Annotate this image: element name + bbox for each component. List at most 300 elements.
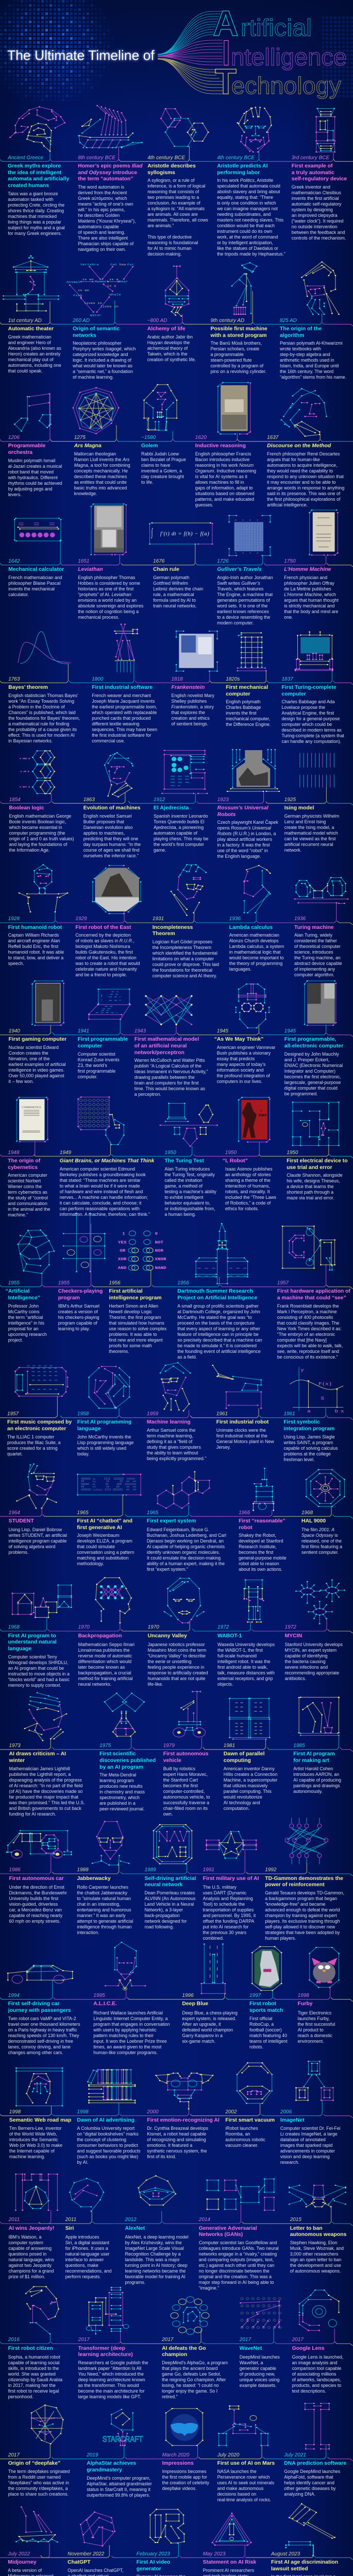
event: Turing machine: considered the father (294, 938, 337, 943)
event: Checkers-playing program: his checkers-playing (58, 1315, 99, 1320)
icon: ELIZA screen: EEEEEE LL IIII ZZZZZZ AAAAA (81, 1478, 136, 1480)
event: Semantic Web road map: machine learning. (9, 2154, 45, 2159)
event: Inductive reasoning: English philosopher Francis (195, 451, 251, 456)
event: Furby: AI product to (298, 2027, 324, 2032)
event: Meta-Dendral: in chemistry and mass (99, 1789, 145, 1794)
event: Gulliver's Travels (217, 558, 273, 625)
text: 1820s (226, 676, 240, 682)
event: Aristotle predicts AI: instrument could do its own (217, 229, 272, 234)
text: 2016 (8, 2337, 20, 2343)
event: First self-driving car journey: on a Paris highway in heavy traffic (8, 2027, 77, 2032)
event: Ctesibius: First example of (292, 163, 332, 169)
text: 1750 (284, 558, 296, 564)
event: WABOT-1: WABOT-1 (217, 1633, 242, 1639)
event: AlphaGo: retired.” (162, 2394, 178, 2399)
event: perceptron: brain and computers for the first (135, 1080, 198, 1086)
icon: semantic network: is an (78, 289, 89, 292)
event: L'Homme Machine (284, 558, 339, 620)
event: STUDENT: intelligence program capable (9, 1538, 66, 1544)
event: MYCIN: antibiotics. (285, 1676, 306, 1681)
event: L'Homme Machine: L’Homme Machine, which (284, 592, 336, 597)
text: 1620 (195, 435, 207, 440)
event: MYCIN: the bacteria causing (285, 1659, 326, 1664)
icon: Perseverance rover (219, 2406, 268, 2446)
icon: semantic network: Animal (66, 281, 80, 284)
event: HAL 9000: first films featuring a (301, 1544, 342, 1549)
event: Uncanny Valley: response to artificially created (148, 1670, 208, 1675)
icon: Boolean logic gates: A AND B (20, 758, 30, 760)
event: autonomous weapons letter: sign an open letter to ban (290, 2257, 341, 2262)
event: First music by computer: score created for a string (7, 1446, 58, 1451)
event: syllogisms: mammals. Therefore, all cows (147, 217, 208, 223)
event: Checkers-playing program: creates a version of (58, 1309, 98, 1314)
event: MYCIN: MYCIN (285, 1633, 302, 1639)
event: Artificial Intelligence term: “Artificial (6, 1289, 29, 1294)
event: El Ajedrecista: Spanish inventor Leonardo (154, 813, 208, 818)
event: Frankenstein: creation and ethics (171, 715, 210, 720)
icon: WABOT-1 (244, 1580, 263, 1622)
event: First robot sports match: sports match (249, 2008, 283, 2013)
event: Gulliver's Travels: The Engine, a machine that (217, 592, 273, 597)
event: Homer: he describes Golden (78, 213, 120, 218)
event: Chain rule (153, 558, 203, 608)
heading: Artificial: A (213, 3, 239, 43)
event: Lambda calculus: American mathematician (229, 933, 279, 938)
text: 1925 (284, 797, 296, 803)
event: Discourse on the Method: they would need the capability to (267, 468, 333, 473)
event: Ctesibius: system by designing (292, 207, 333, 212)
event: Lambda calculus: languages. (229, 967, 251, 972)
event: Programmable orchestra: by adjusting pegs and (8, 486, 53, 492)
event: Google Lens: of artworks, landscapes, (292, 2377, 341, 2382)
event: First autonomous car: capable of reaching nearly (9, 1913, 62, 1918)
heading: Technology: T (215, 61, 237, 101)
icon: semantic network: Fish (73, 294, 82, 297)
event: Homer: means “acting of one’s own (78, 201, 133, 207)
timeline row 18 (0, 2204, 353, 2226)
event: Giant Brains: that stated: “These machines are similar (60, 1178, 141, 1183)
event: Ctesibius: an improved clepsydra (292, 213, 338, 218)
event: stored program: pins on a revolving cylinder. (210, 369, 266, 374)
event: First robot of the East: Concerned by the depiction (75, 933, 131, 938)
icon: DART star (207, 1832, 256, 1858)
event: First use of AI on Mars: Perseverance rover which (217, 2475, 270, 2480)
event: algorithm: “algorithm” stems from his name. (280, 375, 346, 380)
event: Evolution of machines: course of ages we shall find (83, 847, 140, 852)
event: Ctesibius: mathematician Ctesibius (292, 190, 341, 195)
event: Giant Brains: American computer scientist Edmund (60, 1166, 135, 1172)
event: Aristotle predicts AI: the tripods made by Hephaestus.” (217, 251, 285, 257)
event: Discourse on the Method: argues that for human-like (267, 457, 320, 462)
timeline row 16 (0, 1980, 353, 2002)
event: Incompleteness Theorem: Logician Kurt Gödel proposes (153, 939, 212, 944)
event: First humanoid robot: speech. (8, 961, 24, 966)
event: ImageNet: Computer scientist Dr. Fei-Fei (280, 2126, 341, 2131)
event: I, Robot: Isaac Asimov publishes (225, 1166, 273, 1172)
timeline row 7 (0, 903, 353, 925)
event: Logic Theorist: proofs for some math (109, 1343, 152, 1348)
event: WaveNet: WaveNet, a (240, 2360, 263, 2365)
event: ChatGPT (68, 2560, 126, 2576)
event: Incompleteness Theorem: limitations on what a computer (153, 956, 214, 961)
event: Dartmouth: that every aspect of learning or any other (177, 1326, 260, 1331)
event: Dartmouth: proceed on the basis of the conjecture (177, 1320, 255, 1326)
icon: Jacquard loom (115, 624, 137, 672)
event: First robot sports match: teams of intelligent (249, 2039, 288, 2044)
event: Ars Magna: Magna, a tool for combining (74, 463, 130, 468)
event: First robot sports match: First robot (249, 2001, 276, 2007)
event: perceptron: Warren McCulloch and Walter Pitts (135, 1058, 205, 1063)
timeline row 10 (0, 1224, 353, 1289)
event: First expert system: Buchanan, Joshua Lederberg, and Carl (147, 1533, 226, 1538)
event: I, Robot: “I, Robot” (223, 1158, 248, 1164)
event: SAINT: integration program (283, 1426, 334, 1432)
event: AARON: autonomously. (293, 1789, 323, 1794)
event: Programmable orchestra: levers. (8, 492, 22, 497)
event: As We May Think: computers in our lives. (217, 1079, 262, 1084)
event: First self-driving car journey: journey with passengers (8, 2008, 71, 2013)
event: MYCIN: severe infections and (285, 1665, 328, 1670)
event: semantic networks: of machine learning. (73, 375, 114, 380)
icon: Impressions mask (166, 2409, 203, 2446)
event: parallel computing: that utilizes massively (224, 1783, 267, 1788)
event: Chain rule: train neural networks. (153, 603, 197, 608)
event: Meta-Dendral: discoveries published (99, 1758, 156, 1764)
event: ImageNet (280, 2117, 341, 2165)
event: Machine learning: term machine learning, (147, 1433, 193, 1438)
event: STUDENT: writes STUDENT, an artificial (9, 1533, 67, 1538)
event: Incompleteness Theorem (153, 925, 219, 979)
event: First music by computer: First music composed by (7, 1419, 72, 1425)
event: AI wins Jeopardy!: questions posed in (9, 2251, 46, 2257)
event: Semantic Web road map: Web (or Web 3.0) to make (9, 2143, 62, 2148)
event: First use of AI on Mars: decisions based on (217, 2492, 256, 2497)
event: Ancient Greece: living things was a popular (8, 219, 61, 225)
event: The Turing Test: called the imitation (164, 1178, 203, 1183)
icon: automatic theater (4, 256, 59, 311)
event: Aristotle predicts AI: performing labor (217, 170, 260, 176)
event: First robot sports match: robots. (249, 2044, 263, 2049)
icon: NAVLAB (154, 1825, 192, 1864)
event: Logic Theorist (109, 1289, 166, 1354)
event: Incompleteness Theorem: computer science and AI theory. (153, 973, 217, 978)
event: Giant Brains: nerves... A machine can handle information; (60, 1194, 148, 1199)
event: Siri: questions, make (65, 2263, 98, 2268)
event: First robot of the East: biologist Makoto Nishimura (75, 944, 130, 949)
icon: Shakey robot (253, 1468, 274, 1511)
text: 1929 (75, 916, 87, 922)
event: I, Robot: sharing a theme of the (225, 1178, 271, 1183)
event: Statement on AI Risk (203, 2560, 259, 2576)
event: Discourse on the Method: said in its presence. This was one of (267, 491, 340, 496)
event: Kismet: Dr. Cynthia Breazeal develops (147, 2126, 208, 2131)
text: 1726 (217, 558, 228, 564)
text: 2017 (292, 2337, 304, 2343)
icon: Golem (144, 385, 177, 430)
event: ENIAC: Integrator and Computer) (284, 1069, 335, 1074)
text: 1994 (8, 1993, 20, 1998)
text: 1985 (293, 1743, 305, 1749)
event: Siri: Apple introduces (65, 2234, 99, 2240)
event: autonomous weapons letter: Stephen Hawking, Elon (290, 2240, 337, 2245)
event: Dawn of AI advertising: consumer behaviors to predict (77, 2143, 138, 2148)
text: 1968 (301, 1510, 313, 1516)
event: First humanoid robot (8, 925, 64, 967)
event: Golem: Rabbi Judah Loew (141, 451, 179, 456)
event: Lisp: language (77, 1426, 101, 1432)
text: 1943 (135, 1028, 146, 1034)
event: Mark I Perceptron: Frank Rosenblatt develops the (277, 1303, 339, 1309)
event: Meta-Dendral: spectrometry, which (99, 1795, 140, 1800)
event: GANs: no longer discriminate between the (199, 2268, 270, 2274)
event: AlexNet: landslide. This was a major (125, 2257, 180, 2262)
event: Transformer: landmark paper “Attention Is All (78, 2366, 141, 2371)
event: The Turing Test: Alan Turing introduces (164, 1166, 210, 1172)
event: Ancient Greece: Greek myths explore (8, 163, 61, 169)
timeline row 14 (0, 1735, 353, 1752)
icon: Dartmouth Hall (196, 1224, 248, 1284)
event: Turing machine: science, introduces (294, 950, 333, 955)
event: First humanoid robot: and aircraft engineer Alan (8, 938, 60, 943)
event: algorithm: Islam, India, and Europe until (280, 363, 339, 368)
timeline row 3 (0, 394, 353, 442)
event: Uncanny Valley: humanoids that are not quite (148, 1676, 205, 1681)
event: Leviathan: English philosopher Thomas (78, 575, 135, 580)
event: Google Lens: of associating millions (292, 2371, 336, 2377)
text: 825 AD (280, 318, 297, 324)
text: 1854 (9, 797, 21, 803)
event: Machine learning: Arthur Samuel coins the (147, 1428, 195, 1433)
event: TD-Gammon: human players. (265, 1936, 296, 1941)
event: Frankenstein: of sentient beings. (171, 721, 208, 726)
event: El Ajedrecista: the world’s first computer (154, 842, 204, 847)
event: Automatic theater: mechanical play out of (8, 357, 54, 362)
event: Artificial Intelligence term: intelligence” in his (8, 1320, 44, 1326)
event: Deep Blue: Deep Blue, a chess-playing (182, 2010, 238, 2015)
event: ChatGPT: OpenAI launches ChatGPT, (68, 2568, 124, 2573)
event: Dartmouth: Dartmouth Summer Research (177, 1289, 253, 1294)
text: 2017 (162, 2337, 173, 2343)
event: syllogisms: for AI to mimic human (147, 246, 192, 251)
event: Ars Magna: Ramon Llull invents the Ars (74, 457, 129, 462)
text: 1989 (144, 1867, 156, 1873)
event: Mechanical calculator: invents the mechanical (8, 586, 55, 591)
event: Programmable orchestra: Muslim polymath Ismail (8, 458, 55, 463)
event: autonomous weapons letter: the development and use (290, 2263, 341, 2268)
event: Bayes' theorem: English statistician Thomas Bayes’ (8, 692, 78, 698)
event: ALVINN: Dean Pomerleau creates (144, 1890, 195, 1895)
event: Alchemy of life: alchemical theory of (147, 345, 188, 350)
event: Ars Magna: as entities that could unite (74, 480, 127, 485)
event: Gulliver's Travels: word sets. It is one of the (217, 603, 267, 608)
event: First self-driving car journey: travel over one thousand kilometers (8, 2022, 80, 2027)
event: First military use of AI: offset the funding DARPA (203, 1919, 254, 1924)
event: Homer: will.” In his epic poems, (78, 207, 125, 212)
heading: Intelligence: I (222, 33, 230, 73)
event: Chain rule: German polymath (153, 575, 189, 580)
event: Stanford Cart: computer-controlled, (163, 1789, 205, 1794)
text: 1948 (8, 1150, 20, 1156)
text: 1275 (74, 435, 86, 440)
event: First robot sports match: RoboCup, a (249, 2022, 274, 2027)
event: Golem: clay creature brought (141, 474, 184, 479)
text: 1955 (58, 1280, 70, 1286)
heading: Technology: echnology (231, 72, 341, 99)
event: TD-Gammon (265, 1876, 344, 1941)
event: First smart vacuum (225, 2117, 275, 2148)
event: Transformer: as the transformer. This would (78, 2383, 139, 2388)
event: Backpropagation: method for training artificial (78, 1676, 133, 1681)
event: First robot citizen: personhood. (8, 2394, 33, 2399)
icon: AARON artwork (299, 1697, 339, 1735)
event: GANs: major step forward in AI being able to (199, 2280, 274, 2285)
event: Aristotle predicts AI: we can imagine managers not (217, 206, 278, 211)
icon: ELIZA screen (78, 1475, 141, 1495)
event: Chain rule: rule, a mathematical (153, 592, 194, 597)
event: Ancient Greece: created humans (8, 183, 49, 189)
icon: VaMP car (8, 1965, 73, 1984)
event: First mechanical computer: computer (226, 691, 250, 697)
event: Artificial Intelligence term (8, 1289, 47, 1343)
icon: uncanny face (164, 1578, 204, 1623)
icon: chain rule formula: ∫ (151, 526, 153, 539)
event: AARON: First AI program (293, 1751, 335, 1757)
event: Programmable orchestra: robot band that moved (8, 469, 54, 474)
event: Meta-Dendral: The Meta-Dendral (99, 1772, 136, 1777)
text: 1981 (224, 1743, 235, 1749)
event: L'Homme Machine: de La Mettrie publishes (284, 586, 331, 591)
event: Ars Magna: basic truths into advanced (74, 485, 127, 490)
event: syllogisms: two premises leading to a (147, 195, 199, 200)
event: L'Homme Machine: that the body and mind are (284, 609, 338, 614)
event: WABOT-1: first android able to walk, (217, 1665, 268, 1670)
event: SHRDLU (8, 1633, 70, 1688)
text: 1928 (8, 916, 20, 922)
text: 2000 (147, 2109, 159, 2115)
event: The Turing Test: or indistinguishable from, (164, 1206, 215, 1211)
event: Homer: Greek αὐτόματον, which (78, 196, 127, 201)
event: parallel computing (224, 1751, 277, 1811)
event: Ising model: network. (284, 847, 301, 852)
event: First robot of the East: of robots as slaves in R.U.R., (75, 938, 135, 943)
event: ELIZA: that could simulate (77, 1544, 115, 1549)
event: cybernetics: and communication (8, 1201, 47, 1206)
event: El Ajedrecista: Ajedrecista, a pioneering (154, 824, 204, 829)
event: Ars Magna: concepts mechanically. He (74, 468, 128, 473)
event: First use of AI on Mars (217, 2461, 275, 2503)
event: Deep Blue: defeated world champion (182, 2027, 233, 2032)
event: AlexNet (125, 2226, 189, 2285)
event: Jabberwacky (77, 1876, 133, 1936)
event: semantic networks: a “semantic net,” a foundation (73, 369, 133, 374)
event: Aristotle predicts AI: like the statues of Daedalus or (217, 246, 278, 251)
text: 1972 (217, 1624, 229, 1630)
event: Giant Brains: information. A machine, therefore, can think.” (60, 1212, 150, 1217)
icon: Connection Machine (230, 1699, 270, 1739)
event: First expert system: identify unknown organic molecules. (147, 1550, 220, 1555)
event: AlphaGo: champion (162, 2352, 187, 2358)
event: El Ajedrecista: automaton capable of (154, 831, 197, 836)
event: Incompleteness Theorem: the Incompleteness Theorem (153, 945, 211, 950)
event: ALVINN: ALVINN (An Autonomous (144, 1896, 195, 1901)
event: Leviathan (78, 558, 143, 620)
event: cybernetics: term cybernetics as (8, 1190, 47, 1195)
event: First military use of AI: Tool) to schedule the (203, 1902, 245, 1907)
event: Discourse on the Method: artificial intelligence. (267, 502, 308, 507)
event: Deep Blue (182, 2001, 238, 2044)
event: SHRDLU: First AI program to (8, 1633, 56, 1639)
icon: symbolic integration graph: F(x) (318, 1381, 332, 1386)
event: cybernetics (8, 1158, 50, 1218)
event: Uncanny Valley: Japanese robotics professor (148, 1642, 205, 1647)
text: 1912 (154, 797, 165, 803)
event: Leviathan: absolute sovereign and explores (78, 603, 143, 608)
event: AI wins Jeopardy!: IBM’s Watson, a (9, 2234, 41, 2240)
event: AI winter: publishes the Lighthill report, a (9, 1772, 71, 1777)
event: Bayes' theorem: the probability of a cause given its (8, 726, 77, 732)
event: I, Robot: ethics for robots. (225, 1206, 259, 1211)
event: First gaming computer: it – few won. (9, 1079, 34, 1084)
event: Lambda calculus: Lambda calculus (229, 925, 273, 930)
event: semantic networks: what would later be known as (73, 363, 132, 368)
icon: semantic network: has (120, 263, 126, 266)
event: HAL 9000 (301, 1518, 342, 1555)
icon: Ars Magna wheel (73, 388, 119, 434)
event: The Turing Test: behavior equivalent to, (164, 1200, 210, 1206)
event: autonomous weapons letter: Musk, Steve Wozniak, and (290, 2246, 344, 2251)
icon: logic gates table: 1 (122, 1232, 125, 1236)
text: 2019 (87, 2452, 98, 2458)
event: Homer: The word automaton is (78, 184, 124, 190)
event: The Turing Test: testing a machine’s ability (164, 1189, 216, 1194)
event: Boolean logic: computer programming (the (9, 831, 65, 836)
text: 1637 (267, 435, 278, 440)
event: MYCIN: Stanford University develops (285, 1642, 343, 1647)
event: algorithm: wrote textbooks with (280, 346, 321, 351)
event: AlphaStar: DeepMind’s computer program, (87, 2476, 150, 2481)
text: 1945 (217, 1028, 228, 1034)
event: First programmable computer: Konrad Zuse invents (78, 1057, 120, 1062)
event: AI wins Jeopardy!: prize of $1 million. (9, 2274, 45, 2279)
text: 1972 (285, 1624, 296, 1630)
event: Backpropagation: differentiation which would (78, 1659, 131, 1664)
event: First expert system: ability of a human expert, making it the (147, 1561, 225, 1566)
event: deepfake: place to share such creations. (8, 2492, 69, 2497)
icon: backpropagation head (96, 1578, 131, 1623)
event: Boolean logic (9, 797, 74, 853)
text: 2002 (225, 2109, 237, 2115)
event: Ars Magna: Ars Magna (74, 443, 102, 449)
text: 2006 (280, 2109, 292, 2115)
event: Evolution of machines: Butler proposes that (83, 819, 124, 824)
event: Programmable orchestra: rhythms could be achieved (8, 481, 62, 486)
event: First Turing-complete computer: First Turing-complete (281, 685, 337, 690)
text: 3rd century BCE (292, 155, 329, 161)
event: Impressions: Impressions becomes (162, 2469, 206, 2474)
icon: semantic network: Whale (109, 293, 121, 296)
event: First autonomous car (9, 1876, 67, 1924)
text: 2017 (8, 2452, 20, 2458)
event: Mark I Perceptron: a machine that could “see” (277, 1295, 346, 1301)
icon: autonomous weapon drone (289, 2185, 346, 2207)
event: ALVINN: back-propagation (144, 1913, 180, 1918)
event: Rossum's Universal Robots: the English language. (217, 854, 261, 859)
icon: warning triangle (212, 2513, 251, 2545)
icon: SHRDLU blocks (12, 1585, 71, 1617)
event: First humanoid robot: First humanoid robot (8, 925, 62, 930)
event: ELIZA: first generative AI (77, 1525, 122, 1531)
event: perceptron: a perceptron. (135, 1092, 161, 1097)
